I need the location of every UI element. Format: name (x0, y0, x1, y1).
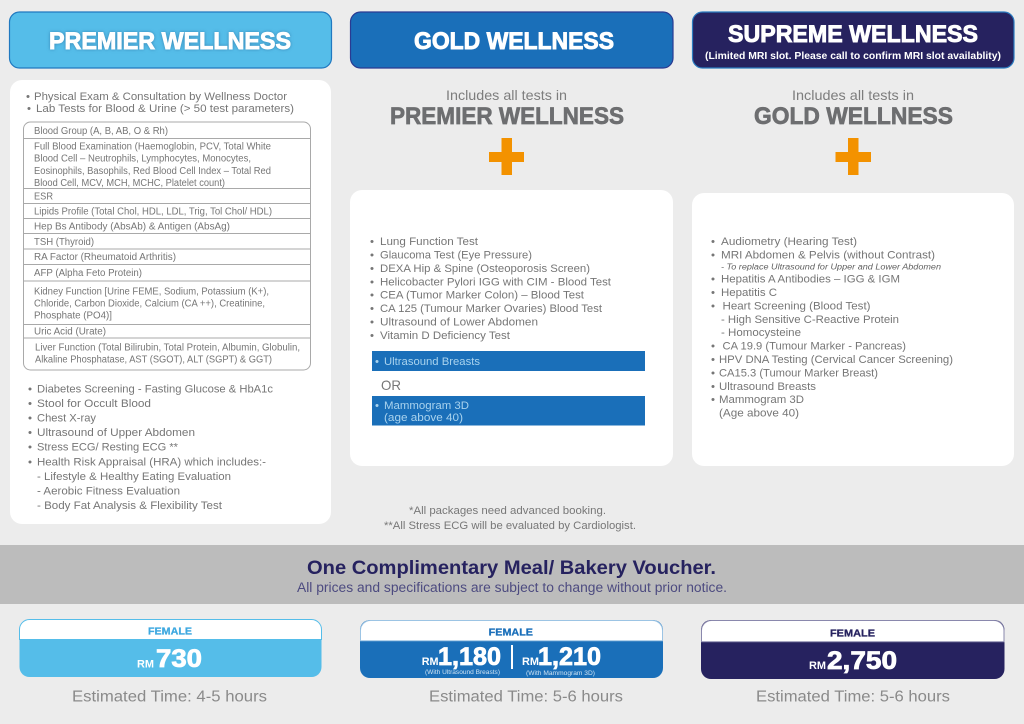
lab test table: Alkaline Phosphatase, AST (SGOT), ALT (SGPT) & GGT) (35, 355, 272, 366)
lab test table: Eosinophils, Basophils, Red Blood Cell Index – Total Red (34, 166, 271, 177)
includes note: premier wellness (390, 87, 624, 130)
price card: gold: (With Mammogram 3D) (526, 671, 595, 677)
panel: gold wellness tests (350, 190, 673, 466)
intro bullet list: • (27, 103, 31, 115)
gold test list: Lung Function Test (380, 236, 479, 248)
header: gold wellness: GOLD WELLNESS (414, 28, 614, 55)
screening bullet list: - Aerobic Fitness Evaluation (37, 486, 180, 498)
lab test table: Hep Bs Antibody (AbsAb) & Antigen (AbsAg) (34, 222, 230, 232)
screening bullet list: - Body Fat Analysis & Flexibility Test (37, 500, 223, 512)
option: ultrasound breasts (372, 351, 645, 371)
supreme test list: - To replace Ultrasound for Upper and Lower Abdomen (721, 262, 942, 272)
price card: supreme (701, 620, 1004, 679)
header: supreme wellness (692, 12, 1014, 68)
supreme test list: • (711, 236, 715, 248)
price card: premier (20, 620, 322, 677)
estimated time: supreme: Estimated Time: 5-6 hours (756, 689, 950, 706)
price card: supreme: FEMALE (830, 628, 875, 640)
includes note: gold wellness (754, 87, 953, 130)
screening bullet list: • (28, 383, 32, 395)
header: supreme wellness: SUPREME WELLNESS (728, 21, 978, 48)
screening bullet list: Diabetes Screening - Fasting Glucose & HbA1c (37, 383, 273, 395)
screening bullet list: • (28, 442, 32, 454)
supreme test list: - Homocysteine (721, 327, 801, 339)
lab test table: ESR (34, 191, 53, 202)
price card: premier: FEMALE (148, 626, 192, 638)
option: mammogram 3d: • (375, 400, 379, 412)
lab test table: Blood Cell – Neutrophils, Lymphocytes, Monocytes, (34, 154, 251, 165)
header: premier wellness (10, 12, 332, 68)
supreme test list: MRI Abdomen & Pelvis (without Contrast) (721, 250, 935, 262)
supreme test list: Hepatitis C (721, 287, 777, 299)
banner: complimentary voucher: All prices and specifications are subject to change without prior notice. (297, 580, 727, 595)
intro bullet list: Lab Tests for Blood & Urine (> 50 test parameters) (36, 103, 294, 115)
header: premier wellness: PREMIER WELLNESS (49, 28, 291, 55)
supreme test list: • (711, 287, 715, 299)
supreme test list: CA 19.9 (Tumour Marker - Pancreas) (722, 340, 906, 352)
intro bullet list (26, 91, 294, 115)
price card: supreme: 2,750 (827, 647, 897, 675)
supreme test list: Mammogram 3D (719, 394, 804, 406)
gold test list: DEXA Hip & Spine (Osteoporosis Screen) (380, 263, 590, 275)
supreme test list: Audiometry (Hearing Test) (721, 236, 857, 248)
gold test list: • (370, 276, 374, 288)
screening bullet list: • (28, 456, 32, 468)
price card: gold: RM (422, 656, 438, 668)
price card: gold: 1,210 (538, 643, 601, 671)
gold test list: • (370, 263, 374, 275)
panel: premier wellness tests (10, 80, 331, 524)
price card: gold: RM (522, 656, 539, 668)
option: mammogram 3d: Mammogram 3D (384, 400, 469, 412)
header: gold wellness (350, 12, 673, 68)
banner: complimentary voucher: One Complimentary Meal/ Bakery Voucher. (307, 558, 716, 579)
supreme test list: CA15.3 (Tumour Marker Breast) (719, 368, 878, 380)
gold test list: Ultrasound of Lower Abdomen (380, 316, 538, 328)
lab test table (24, 122, 310, 370)
screening bullet list: Ultrasound of Upper Abdomen (37, 427, 195, 439)
supreme test list: • (711, 340, 715, 352)
gold test list: CA 125 (Tumour Marker Ovaries) Blood Test (380, 303, 603, 315)
banner: complimentary voucher (0, 545, 1024, 604)
gold test list: Vitamin D Deficiency Test (380, 330, 511, 342)
supreme test list: • (711, 274, 715, 286)
price card: gold: 1,180 (438, 643, 501, 671)
footnotes: **All Stress ECG will be evaluated by Cardiologist. (384, 520, 636, 532)
supreme test list (711, 236, 953, 420)
option: mammogram 3d: (age above 40) (384, 412, 463, 424)
price card: gold (360, 620, 663, 678)
screening bullet list: • (28, 412, 32, 424)
gold test list: • (370, 316, 374, 328)
gold test list: CEA (Tumor Marker Colon) – Blood Test (380, 290, 585, 302)
lab test table: Blood Cell, MCV, MCH, MCHC, Platelet count) (34, 178, 225, 189)
lab test table: Full Blood Examination (Haemoglobin, PCV, Total White (34, 142, 271, 152)
lab test table: AFP (Alpha Feto Protein) (34, 268, 142, 279)
includes note: gold wellness: Includes all tests in (792, 87, 914, 103)
header: supreme wellness: (Limited MRI slot. Please call to confirm MRI slot availablity) (705, 50, 1001, 62)
or label: OR (381, 377, 401, 393)
icon: orange plus (836, 138, 871, 175)
lab test table: Liver Function (Total Bilirubin, Total Protein, Albumin, Globulin, (35, 343, 300, 354)
option: mammogram 3d (372, 396, 645, 426)
screening bullet list: Stool for Occult Blood (37, 398, 151, 410)
lab test table: RA Factor (Rheumatoid Arthritis) (34, 252, 176, 263)
lab test table: Chloride, Carbon Dioxide, Calcium (CA ++), Creatinine, (34, 299, 265, 310)
gold test list: • (370, 250, 374, 262)
price card: gold: (With Ultrasound Breasts) (425, 670, 500, 676)
lab test table: TSH (Thyroid) (34, 237, 94, 248)
supreme test list: • (711, 354, 715, 366)
supreme test list: • (711, 368, 715, 380)
gold test list: • (370, 303, 374, 315)
estimated time: premier: Estimated Time: 4-5 hours (72, 689, 267, 706)
price card: premier: 730 (156, 645, 202, 673)
footnotes: *All packages need advanced booking. (409, 505, 606, 517)
screening bullet list: Health Risk Appraisal (HRA) which includes:- (37, 456, 266, 468)
gold test list (370, 236, 612, 342)
panel: supreme wellness tests (692, 193, 1014, 466)
includes note: gold wellness: GOLD WELLNESS (754, 103, 953, 130)
supreme test list: - High Sensitive C-Reactive Protein (721, 314, 899, 326)
supreme test list: Ultrasound Breasts (719, 381, 816, 393)
includes note: premier wellness: Includes all tests in (446, 87, 567, 103)
gold test list: • (370, 236, 374, 248)
estimated time: gold: Estimated Time: 5-6 hours (429, 689, 623, 706)
includes note: premier wellness: PREMIER WELLNESS (390, 103, 624, 130)
supreme test list: • (711, 381, 715, 393)
screening bullet list: • (28, 427, 32, 439)
footnotes (384, 505, 636, 532)
gold test list: Helicobacter Pylori IGG with CIM - Blood Test (380, 276, 612, 288)
option: ultrasound breasts: Ultrasound Breasts (384, 356, 480, 368)
intro bullet list: Physical Exam & Consultation by Wellness Doctor (34, 91, 287, 103)
icon: orange plus (489, 138, 524, 175)
screening bullet list: Stress ECG/ Resting ECG ** (37, 442, 179, 454)
supreme test list: Hepatitis A Antibodies – IGG & IGM (721, 274, 900, 286)
supreme test list: HPV DNA Testing (Cervical Cancer Screening) (719, 354, 953, 366)
supreme test list: (Age above 40) (719, 408, 799, 420)
gold test list: Glaucoma Test (Eye Pressure) (380, 250, 532, 262)
option: ultrasound breasts: • (375, 356, 379, 368)
price card: supreme: RM (809, 660, 826, 672)
lab test table: Kidney Function [Urine FEME, Sodium, Potassium (K+), (34, 286, 269, 298)
screening bullet list: - Lifestyle & Healthy Eating Evaluation (37, 471, 231, 483)
lab test table: Uric Acid (Urate) (34, 327, 106, 338)
gold test list: • (370, 290, 374, 302)
supreme test list: Heart Screening (Blood Test) (722, 300, 871, 312)
intro bullet list: • (26, 91, 30, 103)
price card: gold: FEMALE (489, 627, 533, 639)
lab test table: Blood Group (A, B, AB, O & Rh) (34, 126, 168, 137)
supreme test list: • (711, 250, 715, 262)
screening bullet list: • (28, 398, 32, 410)
gold test list: • (370, 330, 374, 342)
supreme test list: • (711, 394, 715, 406)
supreme test list: • (711, 300, 715, 312)
price card: premier: RM (137, 658, 154, 670)
lab test table: Lipids Profile (Total Chol, HDL, LDL, Trig, Tol Chol/ HDL) (34, 206, 272, 218)
lab test table: Phosphate (PO4)] (34, 311, 112, 322)
screening bullet list (28, 383, 273, 512)
screening bullet list: Chest X-ray (37, 412, 96, 424)
